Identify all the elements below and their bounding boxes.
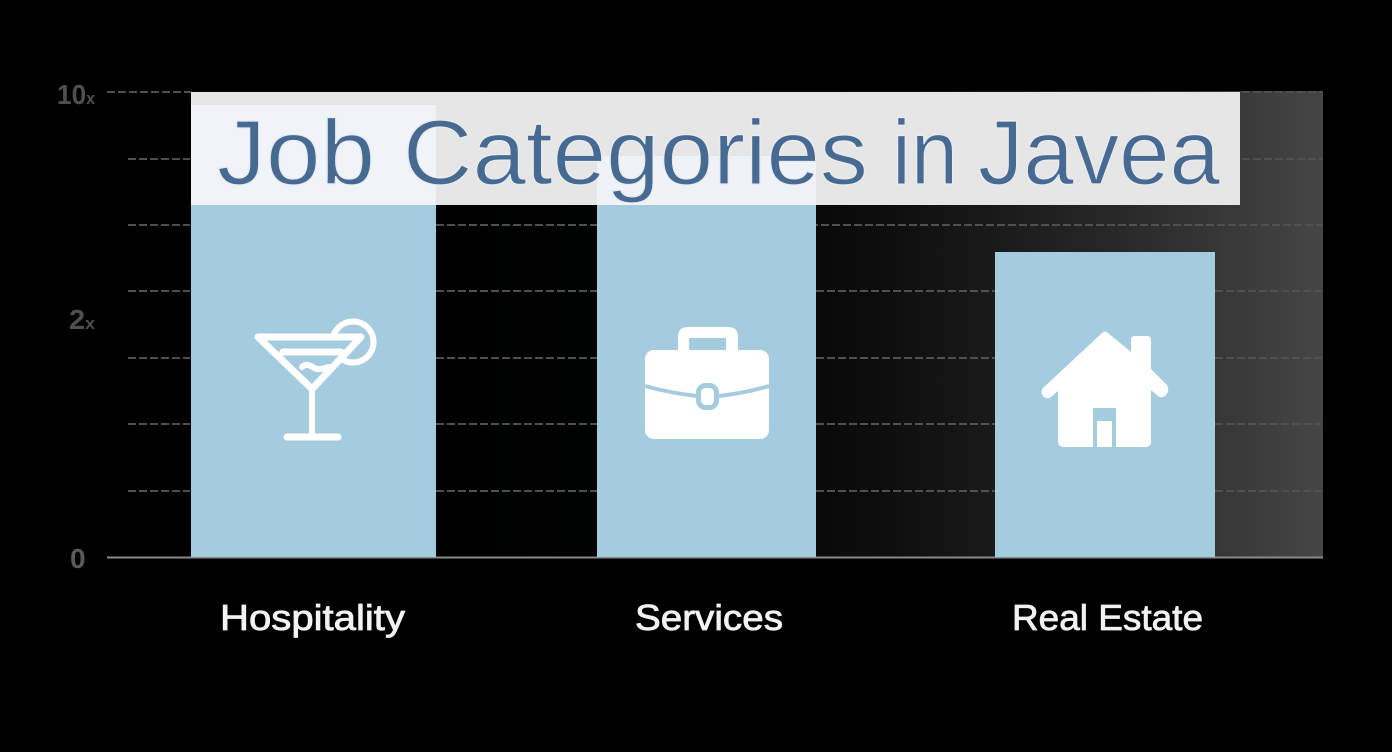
y axis label: 10x: 10x — [57, 79, 95, 110]
label: Hospitality: Hospitality — [220, 597, 405, 638]
label: Services: Services — [635, 597, 783, 638]
plot background gradient — [436, 91, 1323, 557]
title text: Categories — [403, 102, 868, 204]
bar: Services — [597, 205, 816, 557]
bar: Real Estate — [995, 252, 1215, 557]
icon: briefcase — [645, 327, 769, 439]
icon: house — [1042, 332, 1168, 447]
title banner — [191, 92, 1240, 205]
horizontal dashed grid lines — [107, 92, 1323, 491]
baseline axis — [107, 556, 1323, 558]
icon: cocktail glass — [258, 322, 374, 437]
bar: Hospitality — [191, 205, 436, 557]
label: Real Estate: Real Estate — [1012, 597, 1203, 638]
title text: Javea — [978, 102, 1221, 204]
title text: Job — [217, 102, 375, 204]
title text: in — [892, 102, 958, 204]
y axis label: 0: 0 — [70, 543, 86, 574]
y axis label: 2x: 2x — [69, 304, 96, 335]
